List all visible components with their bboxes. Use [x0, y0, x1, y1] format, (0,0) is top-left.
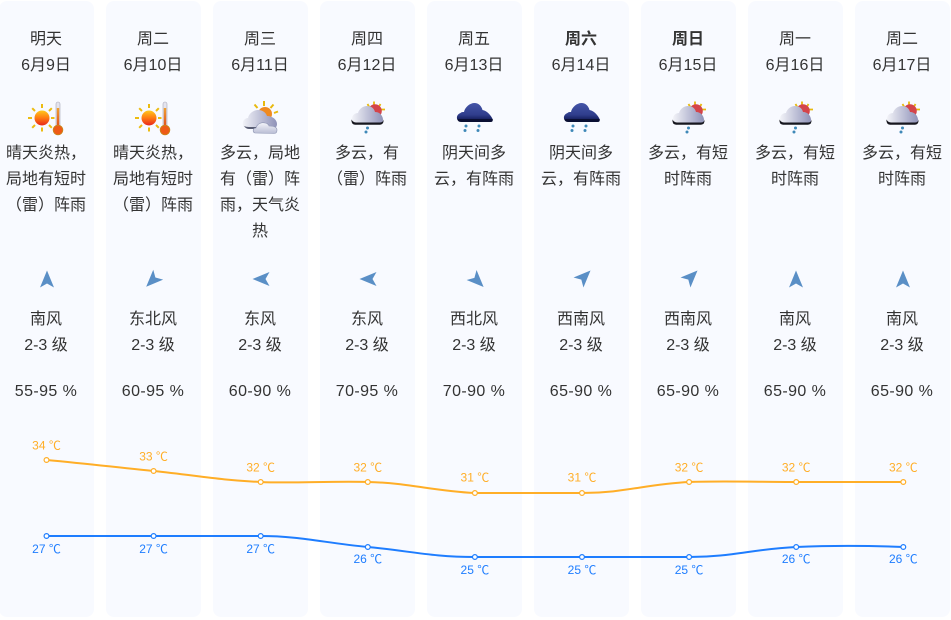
date: [124, 31, 182, 74]
wind: 2-3 级: [559, 336, 603, 354]
date: 6月16日: [766, 57, 824, 74]
date: 6月11日: [231, 57, 289, 74]
date: 6月13日: [445, 57, 503, 74]
icon: wind arrow: [146, 270, 163, 287]
low temperature series: 26 ℃: [353, 552, 382, 566]
wind: [844, 306, 951, 358]
low temperature series: [32, 534, 918, 577]
low temperature series: 27 ℃: [32, 542, 61, 556]
weather description: [755, 144, 835, 188]
panel: day 5: [427, 1, 522, 617]
wind: [450, 310, 498, 354]
weather description: 时阵雨: [664, 171, 712, 188]
wind: [238, 310, 282, 354]
weather description: 晴天炎热，: [113, 145, 193, 162]
icon: dark rain cloud: [564, 103, 600, 132]
weather description: [434, 144, 514, 188]
date: 明天: [30, 31, 62, 48]
low temperature series: 27 ℃: [139, 542, 168, 556]
weather description: 阴天间多: [549, 145, 613, 162]
weather description: 多云，有短: [755, 145, 835, 162]
humidity: 65-90 %: [764, 383, 826, 400]
low temperature series: 27 ℃: [246, 542, 275, 556]
icon: sunny hot: [135, 102, 170, 136]
date: [231, 31, 289, 74]
low temperature series: 25 ℃: [675, 563, 703, 577]
humidity: 65-90 %: [657, 383, 719, 400]
date: [659, 31, 717, 74]
weather description: 晴天炎热，: [6, 145, 86, 162]
date: 周三: [244, 31, 276, 48]
weather description: 局地有短时: [113, 171, 193, 188]
wind: [24, 310, 68, 354]
icon: cloud with showers: [351, 102, 385, 134]
wind: 南风: [30, 310, 62, 328]
high temperature series: 32 ℃: [889, 460, 918, 474]
date: [766, 31, 824, 74]
weather description: 有（雷）阵: [220, 171, 300, 188]
humidity: 70-95 %: [336, 383, 398, 400]
weather description: [113, 144, 193, 214]
date: 周一: [779, 31, 811, 48]
icon: wind arrow: [360, 272, 376, 286]
weather description: [541, 144, 621, 188]
date: [445, 31, 503, 74]
weather description: （雷）阵雨: [327, 171, 407, 188]
humidity: 65-90 %: [871, 383, 933, 400]
date: 周四: [351, 31, 383, 48]
date: 周二: [137, 31, 169, 48]
wind: 东北风: [129, 310, 177, 328]
humidity: 60-95 %: [122, 383, 184, 400]
icon: wind arrow: [40, 270, 54, 288]
wind: [345, 310, 389, 354]
panel: day 1: [0, 1, 94, 617]
wind: 2-3 级: [880, 336, 924, 354]
date: [338, 31, 396, 74]
low temperature series: 25 ℃: [461, 563, 489, 577]
wind: [664, 310, 712, 354]
weather description: 阴天间多: [442, 145, 506, 162]
wind: [773, 310, 817, 354]
weather description: [648, 144, 728, 188]
icon: partly cloudy: [243, 101, 278, 134]
weather description: 多云，有: [335, 145, 399, 162]
humidity: 70-90 %: [443, 383, 505, 400]
high temperature series: 32 ℃: [675, 460, 703, 474]
high temperature series: 32 ℃: [782, 460, 811, 474]
wind: 东风: [244, 310, 276, 328]
date: 6月12日: [338, 57, 396, 74]
weather description: （雷）阵雨: [6, 197, 86, 214]
wind: 东风: [351, 310, 383, 328]
date: 6月14日: [552, 57, 610, 74]
wind: 2-3 级: [452, 336, 496, 354]
weather description: [220, 144, 300, 240]
humidity: 65-90 %: [550, 383, 612, 400]
low temperature series: 26 ℃: [782, 552, 811, 566]
panel: day 8: [748, 1, 843, 617]
weather description: 多云，有短: [862, 145, 942, 162]
wind: 2-3 级: [345, 336, 389, 354]
panel: day 7: [641, 1, 736, 617]
weather description: [844, 141, 951, 193]
date: [552, 30, 610, 74]
high temperature series: [32, 438, 918, 495]
icon: cloud with showers: [780, 102, 813, 134]
weather description: 时阵雨: [771, 171, 819, 188]
date: 周五: [458, 31, 490, 48]
icon: wind arrow: [466, 270, 484, 287]
date: 周六: [565, 31, 597, 48]
high temperature series: 32 ℃: [246, 460, 275, 474]
weather description: 云，有阵雨: [434, 171, 514, 188]
wind: 2-3 级: [238, 336, 282, 354]
weather description: 雨，天气炎: [220, 197, 300, 214]
date: [21, 31, 71, 74]
humidity: 55-95 %: [15, 383, 77, 400]
wind: [129, 310, 177, 354]
weather description: 多云，有短: [648, 145, 728, 162]
weather description: 局地有短时: [6, 171, 86, 188]
wind: 西北风: [450, 310, 498, 328]
weather description: 时阵雨: [878, 171, 926, 188]
wind: 西南风: [664, 310, 712, 328]
icon: sunny hot: [28, 102, 64, 136]
panel: day 9: [855, 1, 950, 617]
high temperature series: 31 ℃: [568, 470, 596, 484]
wind: 西南风: [557, 310, 605, 328]
date: 6月10日: [124, 57, 182, 74]
wind: 2-3 级: [773, 336, 817, 354]
weather description: [327, 144, 407, 188]
icon: wind arrow: [680, 270, 698, 288]
icon: dark rain cloud: [456, 103, 493, 132]
high temperature series: 32 ℃: [353, 460, 382, 474]
panel: day 3: [213, 1, 308, 617]
date: 周二: [886, 31, 918, 48]
icon: cloud with showers: [672, 102, 706, 134]
high temperature series: 33 ℃: [139, 450, 168, 464]
panel: day 4: [320, 1, 415, 617]
icon: wind arrow: [789, 270, 803, 288]
weather description: （雷）阵雨: [113, 197, 193, 214]
date: 6月9日: [21, 57, 71, 74]
wind: 2-3 级: [131, 336, 175, 354]
wind: 2-3 级: [666, 336, 710, 354]
high temperature series: 31 ℃: [461, 470, 489, 484]
date: 6月15日: [659, 57, 717, 74]
date: 周日: [672, 31, 704, 48]
date: [844, 27, 951, 79]
low temperature series: 25 ℃: [568, 563, 596, 577]
date: 6月17日: [873, 57, 931, 74]
panel: day 2: [106, 1, 201, 617]
weather description: 多云，局地: [220, 145, 300, 162]
wind: [557, 310, 605, 354]
panel: day 6: [534, 1, 629, 617]
wind: 南风: [886, 310, 918, 328]
wind: 南风: [779, 310, 811, 328]
low temperature series: 26 ℃: [889, 552, 918, 566]
icon: cloud with showers: [855, 96, 950, 141]
high temperature series: 34 ℃: [32, 438, 61, 452]
icon: wind arrow: [252, 272, 270, 286]
weather description: [6, 144, 86, 214]
humidity: 60-90 %: [229, 383, 291, 400]
weather description: 云，有阵雨: [541, 171, 621, 188]
icon: wind arrow: [891, 267, 915, 291]
weather description: 热: [252, 223, 268, 240]
wind: 2-3 级: [24, 336, 68, 354]
icon: wind arrow: [574, 270, 590, 288]
